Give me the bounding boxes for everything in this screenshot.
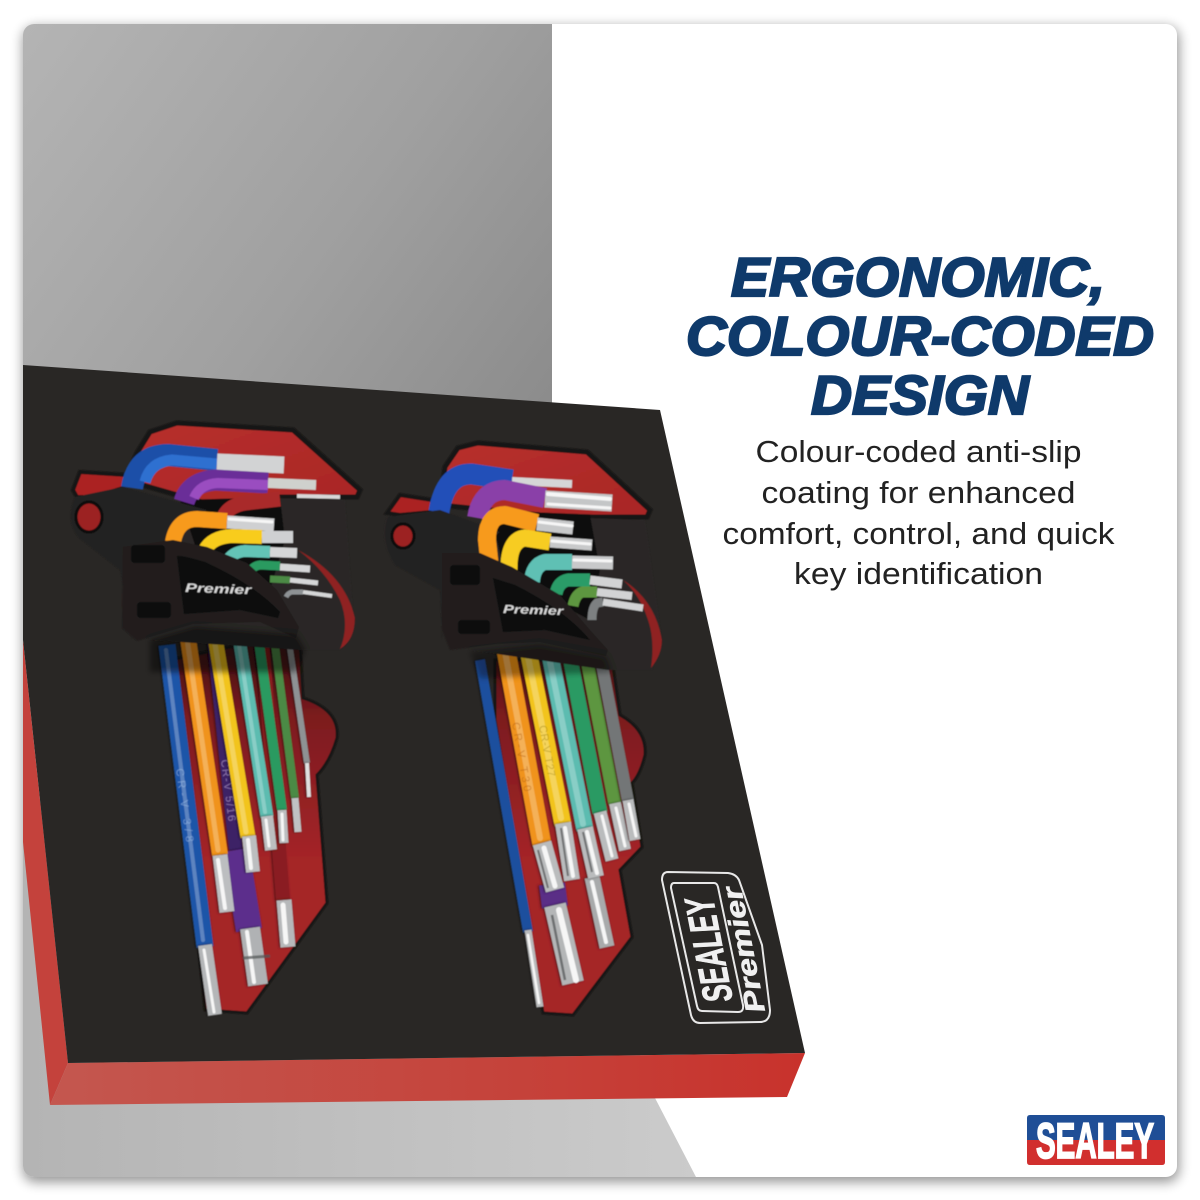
yellow handle (205, 536, 293, 550)
right bracket hole (392, 524, 414, 548)
green torx key (568, 647, 612, 860)
inner outline (671, 883, 743, 1012)
purple handle (184, 480, 316, 502)
olive handle (270, 579, 318, 583)
red torx key (592, 877, 607, 947)
grey backdrop upper (23, 24, 552, 402)
left recess shadow (180, 497, 285, 590)
left set lower stems (166, 625, 309, 1015)
right premier label: Premier (503, 602, 565, 618)
foam tray front side (50, 1053, 805, 1105)
orange torx handle (487, 515, 573, 568)
left hinge lower (137, 602, 171, 618)
right back bracket (384, 510, 662, 670)
left bracket hole (76, 502, 102, 532)
left back bracket (71, 487, 353, 650)
grey torx key (600, 655, 636, 840)
grey backdrop lower (23, 800, 696, 1177)
blue torx handle (439, 474, 572, 512)
right bracket rear (385, 510, 500, 640)
left premier label: Premier (185, 581, 253, 597)
olive torx handle (573, 592, 632, 606)
right logo plate (493, 578, 590, 640)
logo red band (1027, 1140, 1165, 1165)
hex key set (71, 423, 662, 1015)
left logo plate (177, 556, 280, 618)
cutout: set one upper (125, 423, 360, 510)
left back keys (132, 455, 340, 517)
cutout: set two left wedge (387, 495, 432, 515)
headline (686, 246, 1154, 426)
cutout: set two lower (495, 660, 645, 1015)
grey key (288, 635, 309, 797)
right front bracket (442, 553, 608, 656)
foam tray left side (23, 640, 68, 1105)
teal torx handle (532, 560, 613, 582)
purple key (214, 640, 270, 985)
green torx handle (556, 580, 622, 594)
logo blue band (1027, 1115, 1165, 1140)
teal key (237, 625, 271, 850)
headline line one: ERGONOMIC, (731, 246, 1105, 308)
teal handle (227, 551, 297, 562)
orange torx key (505, 645, 555, 890)
right under bracket shadow (470, 644, 612, 678)
blue torx key (480, 660, 540, 1007)
yellow torx handle (509, 538, 592, 572)
right back keys (439, 474, 612, 518)
right set lower stems (480, 645, 636, 1007)
right hinge upper (450, 565, 480, 585)
orange torx stamp: CR-V T30 (509, 721, 533, 792)
purple key stamp: CR-V 5/16 (218, 759, 237, 822)
right front keys (487, 515, 643, 620)
green key (257, 628, 284, 843)
headline line three: DESIGN (811, 364, 1030, 426)
blue handle (132, 455, 284, 488)
foam tray top face (23, 365, 805, 1063)
SEALEY foam wordmark: SEALEY (676, 896, 742, 1003)
teal torx key (548, 645, 597, 877)
product photo panel (23, 24, 805, 1177)
grey torx handle (592, 602, 643, 620)
green handle (249, 565, 310, 574)
olive torx key (585, 650, 625, 850)
description line three: comfort, control, and quick (722, 516, 1115, 551)
purple torx key (552, 884, 576, 983)
sealey premier foam logo (662, 872, 771, 1023)
cutout: set two upper (440, 443, 650, 517)
description line four: key identification (794, 556, 1043, 591)
blue key stamp: CR-V 3/8 (173, 768, 195, 843)
yellow torx stamp: CR-V T27 (536, 724, 557, 778)
cutout: set two crescent (623, 580, 662, 668)
right recess shadow (490, 510, 600, 620)
right hinge lower (458, 620, 490, 634)
left under bracket shadow (150, 627, 305, 672)
cutout: set one lower (170, 640, 337, 1013)
orange handle (173, 519, 274, 542)
description line one: Colour-coded anti-slip (756, 434, 1082, 469)
red handle (224, 496, 340, 517)
yellow key (213, 625, 253, 872)
Premier foam wordmark: Premier (717, 882, 771, 1016)
outer outline (662, 872, 770, 1023)
purple torx handle (477, 490, 612, 518)
description text (722, 434, 1115, 591)
red key (262, 640, 288, 947)
left hinge upper (131, 545, 165, 563)
cutout: set one left wedge (73, 472, 127, 497)
yellow torx key (527, 645, 573, 880)
left front bracket (122, 540, 299, 641)
description line two: coating for enhanced (762, 475, 1076, 510)
headline line two: COLOUR-CODED (686, 305, 1154, 367)
cutout: set one crescent (298, 550, 355, 649)
left front keys (173, 519, 332, 597)
left bracket rear (71, 488, 206, 574)
grey handle (286, 592, 332, 597)
orange key (186, 625, 227, 912)
blue long key (166, 645, 215, 1015)
olive key (273, 630, 298, 832)
sealey corner logo (1027, 1113, 1165, 1169)
